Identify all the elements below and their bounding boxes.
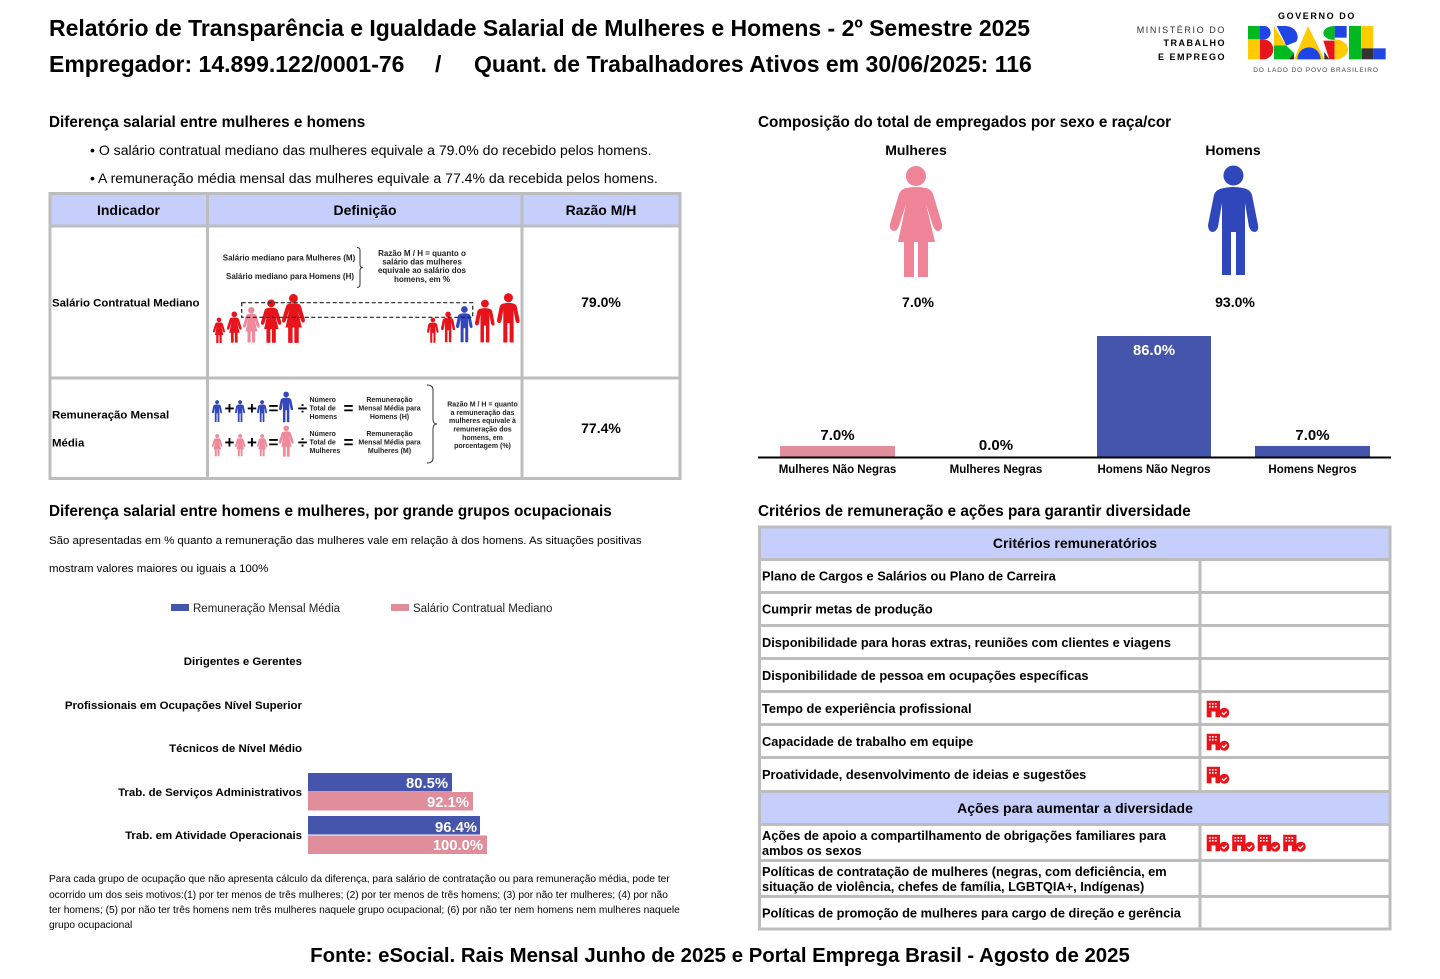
heading: diferença salarial: Diferença salarial entre mulheres e homens	[49, 114, 365, 131]
icon: mulher	[890, 166, 942, 277]
criteria rows: Disponibilidade para horas extras, reuniões com clientes e viagens	[762, 635, 1171, 650]
row: salário contratual mediano: Salário Contratual Mediano	[52, 298, 200, 310]
logo: ministério e governo do Brasil: TRABALHO	[1164, 38, 1226, 48]
bar chart: ocupações	[65, 656, 487, 854]
diagram: remuneração média: =	[269, 433, 279, 452]
logo: ministério e governo do Brasil: GOVERNO DO	[1278, 11, 1356, 21]
icons: mulheres	[213, 294, 305, 343]
criteria rows	[762, 568, 1171, 782]
diagram: remuneração média: homens, em	[462, 435, 503, 442]
source footer: Fonte: eSocial. Rais Mensal Junho de 2025 e Portal Emprega Brasil - Agosto de 2025	[310, 945, 1130, 967]
logo: ministério e governo do Brasil: MINISTÉRIO DO	[1137, 25, 1226, 35]
action rows: ambos os sexos	[762, 843, 862, 858]
diagram: remuneração média: =	[344, 399, 354, 418]
diagram: remuneração média: a remuneração das	[451, 410, 515, 417]
action rows: situação de violência, chefes de família, LGBTQIA+, Indígenas)	[762, 879, 1144, 894]
diagram: remuneração média: Número	[310, 397, 336, 404]
bar chart: ocupações: Trab. em Atividade Operacionais	[125, 830, 302, 842]
diagram: remuneração média: Remuneração	[366, 397, 413, 404]
bar chart: ocupações: Dirigentes e Gerentes	[184, 656, 302, 668]
logo: ministério e governo do Brasil	[1137, 11, 1386, 74]
bar chart: sexo e raça: 0.0%	[979, 437, 1013, 454]
diagram: salário mediano: Razão M / H = quanto o	[378, 249, 466, 258]
diagram: remuneração média: Mulheres (M)	[368, 448, 411, 455]
panel: composição	[758, 114, 1391, 476]
diagram: remuneração média: =	[344, 433, 354, 452]
diagram: remuneração média: ÷	[298, 399, 307, 418]
diagram: remuneração média: Mulheres	[310, 448, 340, 455]
logo: ministério e governo do Brasil: E EMPREGO	[1158, 52, 1226, 62]
action rows: Ações de apoio a compartilhamento de obrigações familiares para	[762, 828, 1167, 843]
diagram: remuneração média: Razão M / H = quanto	[447, 402, 518, 408]
text block: explicação: mostram valores maiores ou iguais a 100%	[49, 563, 268, 575]
bar chart: sexo e raça: Mulheres Negras	[950, 464, 1042, 476]
icons: homens	[427, 293, 520, 343]
diagram: remuneração média: Homens (H)	[370, 414, 409, 421]
bar chart: sexo e raça: 7.0%	[1295, 427, 1330, 444]
criteria rows: Capacidade de trabalho em equipe	[762, 734, 973, 749]
footnote: Para cada grupo de ocupação que não apresenta cálculo da diferença, para salário de contratação ou para remuneração média, pode ter	[49, 874, 670, 885]
row: remuneração mensal média	[52, 410, 621, 450]
diagram: remuneração média: Número	[310, 431, 336, 438]
text block: resumo: • O salário contratual mediano das mulheres equivale a 79.0% do recebido pelos homens.	[90, 142, 652, 158]
criteria rows: Cumprir metas de produção	[762, 602, 933, 616]
diagram: remuneração média: remuneração dos	[453, 426, 512, 434]
diagram: remuneração média: Remuneração	[366, 431, 413, 438]
bar chart: sexo e raça: Mulheres Não Negras	[779, 464, 896, 476]
bar chart: ocupações: Técnicos de Nível Médio	[169, 743, 302, 755]
diagram: salário mediano: Salário mediano para Homens (H)	[226, 272, 354, 281]
legend: Salário Contratual Mediano	[413, 603, 552, 615]
diagram: remuneração média: porcentagem (%)	[454, 443, 511, 450]
diagram: remuneração média: Total de	[310, 440, 336, 446]
footnote: ocorrido um dos seis motivos:(1) por ter menos de três mulheres; (2) por ter menos de três homens; (3) por não ter mulheres; (4) por não	[49, 890, 668, 901]
table header	[97, 202, 636, 218]
diagram: remuneração média: mulheres equivale à	[449, 418, 516, 425]
icons: empresa com check	[1207, 701, 1306, 852]
title: Empregador: 14.899.122/0001-76	[49, 51, 404, 77]
table header: Razão M/H	[566, 202, 636, 218]
criteria rows: Proatividade, desenvolvimento de ideias e sugestões	[762, 767, 1086, 782]
bar chart: ocupações: 100.0%	[433, 838, 483, 854]
diagram: remuneração média: +	[247, 433, 257, 452]
header: critérios remuneratórios: Critérios remuneratórios	[993, 535, 1157, 551]
diagram: remuneração média: +	[225, 433, 235, 452]
bar chart: ocupações: 96.4%	[435, 820, 477, 836]
group: mulheres: 7.0%	[902, 294, 935, 310]
panel: critérios	[758, 503, 1390, 929]
diagram: remuneração média: Total de	[310, 406, 336, 412]
icon: homem	[1208, 166, 1258, 275]
diagram: salário mediano: equivale ao salário dos	[378, 266, 467, 275]
diagram: remuneração média: +	[247, 399, 257, 418]
action rows: Políticas de promoção de mulheres para cargo de direção e gerência	[762, 906, 1182, 920]
row: remuneração mensal média: 77.4%	[581, 420, 621, 436]
group: mulheres	[885, 142, 947, 310]
bar chart: ocupações: Trab. de Serviços Administrativos	[118, 787, 302, 799]
bar chart: sexo e raça: 86.0%	[1133, 343, 1175, 359]
action rows: Políticas de contratação de mulheres (negras, com deficiência, em	[762, 864, 1167, 879]
criteria rows: Tempo de experiência profissional	[762, 701, 972, 716]
diagram: salário mediano: Salário mediano para Mulheres (M)	[223, 254, 356, 262]
table: critérios	[759, 527, 1390, 929]
diagram: remuneração média: Mensal Média para	[358, 406, 421, 412]
title: Relatório de Transparência e Igualdade Salarial de Mulheres e Homens - 2º Semestre 2025	[49, 15, 1030, 41]
footnote: ter homens; (5) por não ter três homens nem três mulheres naquele grupo ocupacional; (6) por não ter nem homens nem mulheres naquele	[49, 905, 680, 916]
row: salário contratual mediano	[52, 294, 621, 310]
legend: Remuneração Mensal Média	[193, 603, 341, 615]
table: indicadores	[49, 193, 681, 479]
criteria rows: Disponibilidade de pessoa em ocupações específicas	[762, 668, 1088, 683]
diagram: remuneração média: +	[225, 399, 235, 418]
title: /	[435, 51, 442, 77]
footnote	[49, 874, 680, 931]
bar chart: sexo e raça	[758, 336, 1391, 476]
diagram: remuneração média	[212, 385, 518, 463]
panel: grupos ocupacionais	[49, 503, 680, 931]
logo: ministério e governo do Brasil: DO LADO DO POVO BRASILEIRO	[1253, 67, 1379, 74]
diagram: remuneração média: =	[269, 399, 279, 418]
diagram: salário mediano	[213, 248, 520, 343]
heading: composição: Composição do total de empregados por sexo e raça/cor	[758, 114, 1171, 131]
heading: critérios: Critérios de remuneração e ações para garantir diversidade	[758, 503, 1191, 520]
footnote: grupo ocupacional	[49, 920, 132, 931]
group: homens: Homens	[1205, 142, 1261, 158]
title: Quant. de Trabalhadores Ativos em 30/06/2025: 116	[474, 51, 1032, 77]
action rows	[762, 828, 1182, 920]
diagram: salário mediano: salário das mulheres	[382, 258, 462, 266]
diagram: remuneração média: ÷	[298, 433, 307, 452]
row: remuneração mensal média: Remuneração Mensal	[52, 410, 169, 422]
group: mulheres: Mulheres	[885, 142, 947, 158]
group: homens: 93.0%	[1215, 294, 1255, 310]
bar chart: sexo e raça: 7.0%	[820, 427, 855, 444]
heading: grupos ocupacionais: Diferença salarial entre homens e mulheres, por grande grupos ocupacionais	[49, 503, 612, 520]
row: salário contratual mediano: 79.0%	[581, 294, 621, 310]
bar chart: ocupações: Profissionais em Ocupações Nível Superior	[65, 700, 303, 712]
text block: explicação	[49, 535, 642, 575]
text block: resumo	[90, 142, 658, 186]
bar chart: sexo e raça: Homens Não Negros	[1097, 464, 1211, 476]
title	[49, 15, 1032, 77]
panel: diferença salarial	[49, 114, 681, 479]
group: homens	[1205, 142, 1261, 310]
criteria rows: Plano de Cargos e Salários ou Plano de Carreira	[762, 568, 1057, 584]
bar chart: sexo e raça: Homens Negros	[1268, 464, 1357, 476]
bar chart: ocupações: 80.5%	[406, 776, 448, 792]
text block: resumo: • A remuneração média mensal das mulheres equivale a 77.4% da recebida pelos homens.	[90, 170, 658, 186]
table header: Indicador	[97, 202, 161, 218]
legend	[171, 603, 552, 615]
diagram: salário mediano: homens, em %	[394, 275, 450, 284]
bar chart: ocupações: 92.1%	[427, 795, 469, 811]
table header: Definição	[333, 202, 397, 218]
diagram: remuneração média: Mensal Média para	[358, 440, 421, 446]
row: remuneração mensal média: Média	[52, 438, 85, 450]
text block: explicação: São apresentadas em % quanto a remuneração das mulheres vale em relação à dos homens. As situações positivas	[49, 535, 642, 547]
header: ações: Ações para aumentar a diversidade	[957, 800, 1193, 816]
diagram: remuneração média: Homens	[310, 414, 337, 421]
